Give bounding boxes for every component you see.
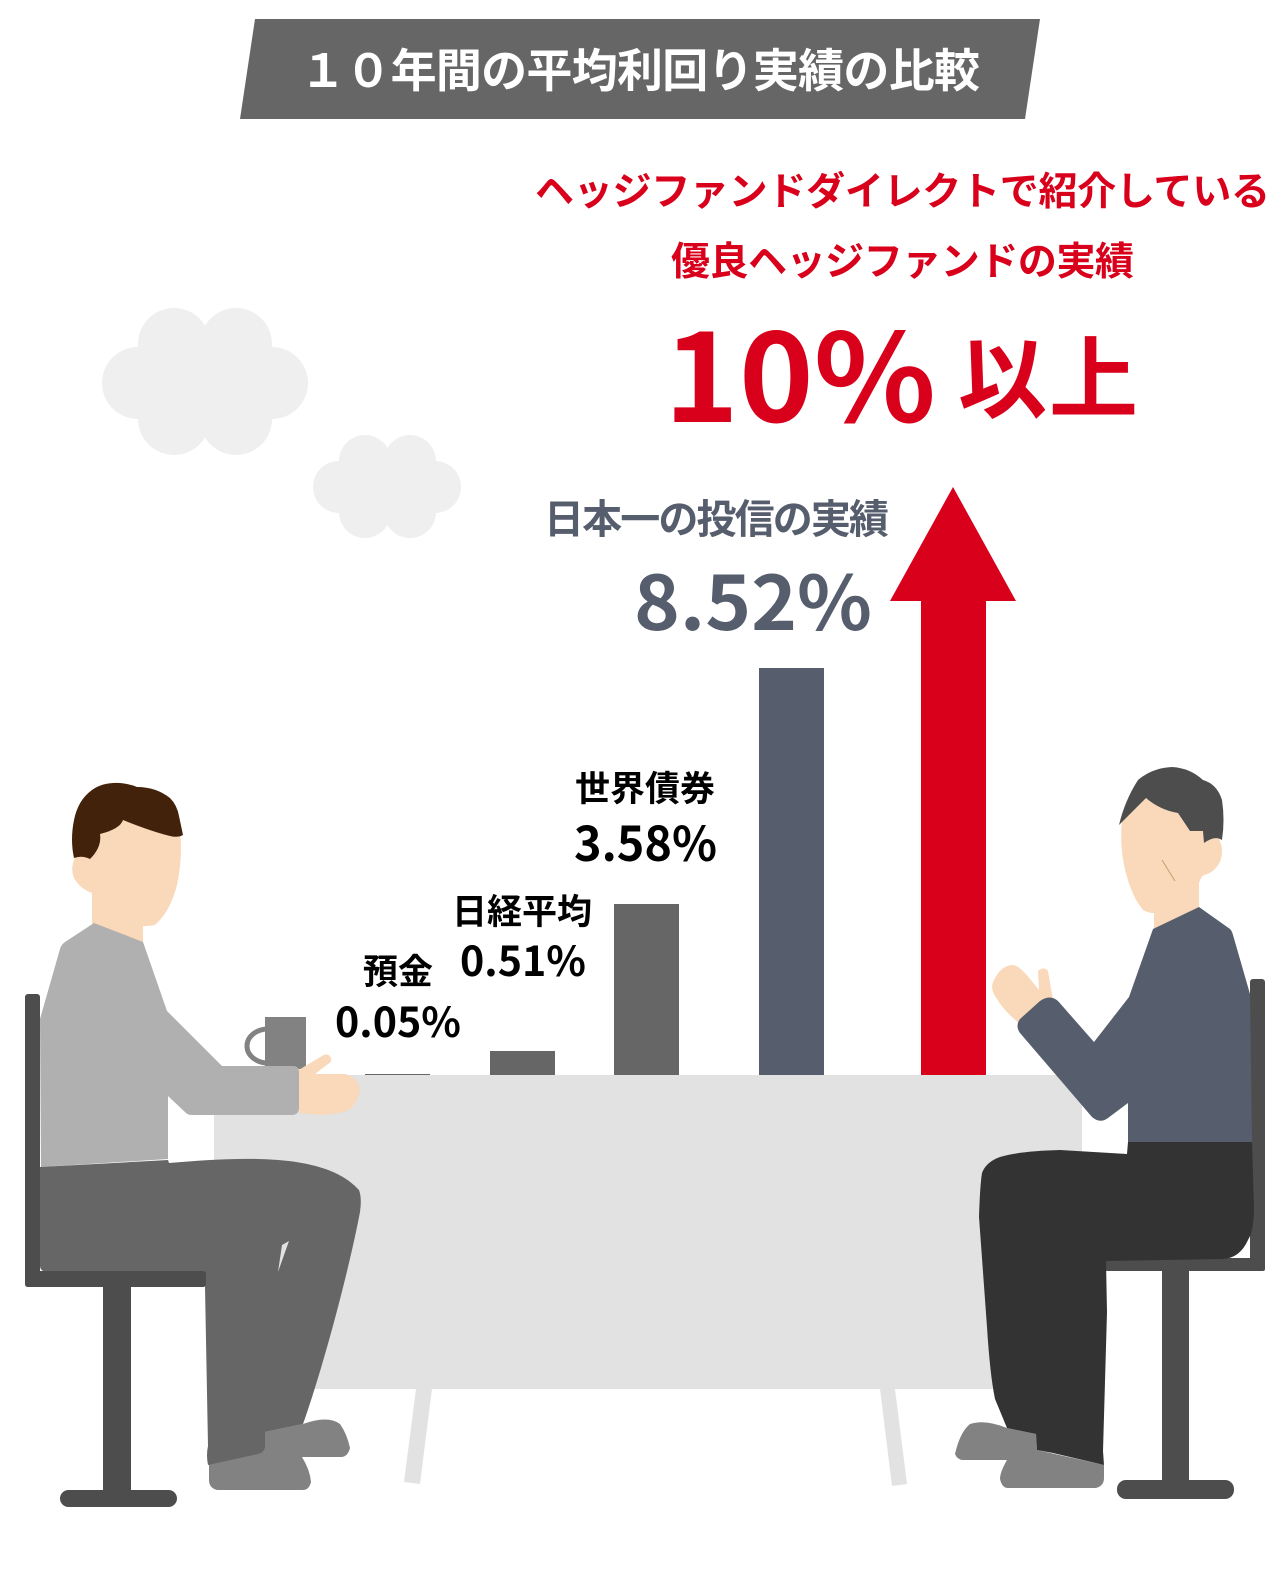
- red headline: hedge fund direct: 優良ヘッジファンドの実績: [671, 231, 1134, 287]
- bar: top investment trust: [759, 668, 824, 1075]
- table: [214, 1075, 1082, 1486]
- right man shoes: [955, 1422, 1104, 1488]
- label: top Japanese investment trust 8.52%: 8.52%: [634, 543, 872, 652]
- right man shirt: [1018, 907, 1252, 1142]
- label: world bonds 3.58%: 世界債券: [575, 761, 715, 812]
- icon: large thought cloud: [102, 308, 308, 455]
- bar: Nikkei average: [490, 1051, 555, 1075]
- right man hair: [1119, 767, 1224, 843]
- label: top Japanese investment trust 8.52%: 日本一の投信の実績: [544, 487, 889, 545]
- bar: world bonds: [614, 904, 679, 1075]
- red headline: hedge fund direct: ヘッジファンドダイレクトで紹介している: [535, 161, 1270, 217]
- label: top Japanese investment trust 8.52%: [544, 487, 889, 652]
- label: deposits 0.05%: 0.05%: [335, 989, 461, 1049]
- left man head and neck: [72, 790, 181, 945]
- left chair: [25, 994, 206, 1507]
- big figure: 10% or more: 以上: [958, 308, 1138, 437]
- right man trousers: [979, 1142, 1254, 1465]
- bar: deposits: [365, 1074, 430, 1075]
- title banner: １０年間の平均利回り実績の比較: [300, 35, 980, 101]
- label: world bonds 3.58%: 3.58%: [574, 805, 717, 875]
- right man cheek line: [1162, 860, 1175, 881]
- icon: small thought cloud: [313, 435, 461, 538]
- right chair: [1105, 979, 1265, 1499]
- label: deposits 0.05%: 預金: [363, 944, 433, 995]
- label: world bonds 3.58%: [574, 761, 717, 875]
- title banner: [240, 19, 1040, 119]
- label: Nikkei average 0.51%: [452, 884, 592, 988]
- right man hand: [992, 965, 1053, 1024]
- left man hair: [72, 783, 183, 859]
- icon: mug: [247, 1017, 306, 1069]
- big figure: 10% or more: [664, 281, 1138, 458]
- big figure: 10% or more: 10%: [664, 281, 936, 458]
- figure: right man seated: [955, 767, 1265, 1499]
- right man head and neck: [1121, 785, 1222, 935]
- left man leg highlight: [278, 1241, 289, 1272]
- label: deposits 0.05%: [335, 944, 461, 1049]
- arrow: hedge fund performance: [890, 487, 1016, 1075]
- label: Nikkei average 0.51%: 日経平均: [452, 884, 592, 935]
- left man hand: [297, 1054, 360, 1115]
- left man trousers: [40, 1159, 361, 1465]
- red headline: hedge fund direct: [535, 161, 1270, 287]
- left man shirt: [40, 923, 299, 1167]
- label: Nikkei average 0.51%: 0.51%: [460, 928, 586, 988]
- left seat front: [25, 1271, 206, 1287]
- figure: left man seated: [25, 783, 361, 1507]
- left man shoes: [209, 1420, 350, 1490]
